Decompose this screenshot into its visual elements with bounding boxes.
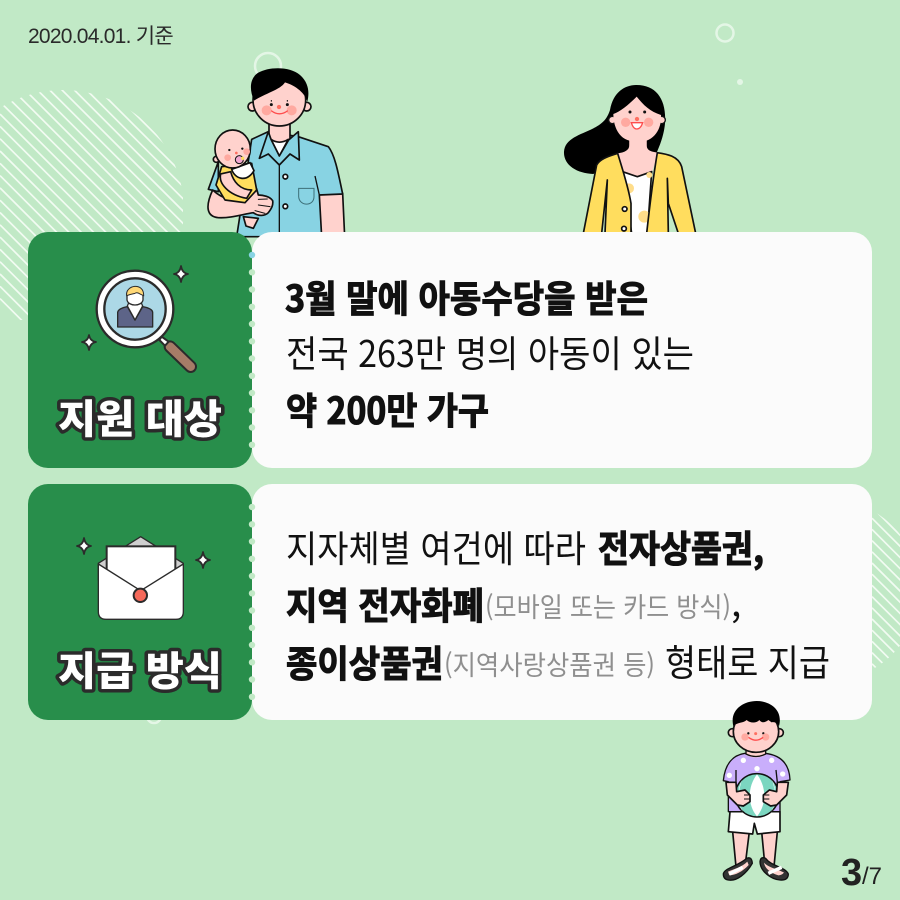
panel: payment method description — [249, 484, 872, 720]
ticket perforation dots — [249, 252, 255, 448]
date label: 2020.04.01. 기준 — [28, 25, 173, 48]
description text — [285, 269, 694, 435]
description text: 종이상품권 — [286, 634, 443, 688]
description text: (지역사랑상품권 등) — [444, 644, 655, 683]
illustration: boy holding ball — [723, 701, 790, 880]
icon: envelope — [98, 537, 183, 619]
label text: 지급 방식 — [58, 639, 222, 697]
description text: 지역 전자화폐 — [286, 576, 484, 630]
page number — [841, 852, 882, 894]
decorative rings — [147, 24, 743, 723]
description text: (모바일 또는 카드 방식) — [485, 586, 731, 625]
icon: magnifying glass with person — [97, 271, 191, 367]
icon: sparkle — [77, 538, 210, 568]
icon: sparkle — [82, 266, 188, 350]
description text: 약 200만 가구 — [286, 381, 489, 435]
illustration: mother in yellow cardigan — [564, 85, 696, 233]
description text: 전자상품권, — [598, 519, 764, 573]
label text: 지원 대상 — [58, 387, 222, 445]
illustration: father holding baby — [208, 68, 345, 237]
description text: 전국 263만 명의 아동이 있는 — [286, 324, 694, 378]
striped decoration right — [872, 514, 900, 668]
description text: 3월 말에 아동수당을 받은 — [285, 269, 648, 323]
panel: payment method label — [28, 484, 252, 720]
description text: , — [731, 574, 741, 628]
panel: support target description — [249, 232, 872, 468]
page number: /7 — [862, 863, 882, 890]
description text: 형태로 지급 — [665, 633, 830, 687]
description text: 지자체별 여건에 따라 — [286, 519, 586, 573]
page number: 3 — [841, 852, 862, 894]
description text — [286, 519, 830, 688]
striped decoration left — [0, 90, 183, 320]
ticket perforation dots — [249, 504, 255, 700]
panel: support target label — [28, 232, 252, 468]
